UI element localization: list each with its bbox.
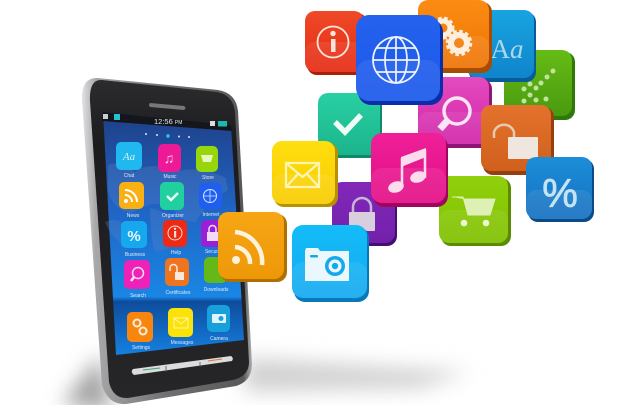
app: Search bbox=[124, 260, 150, 299]
app: Downloads: Downloads bbox=[204, 287, 229, 293]
speaker grille bbox=[149, 103, 186, 110]
icon tile: check bbox=[318, 93, 382, 158]
icon tile: cart bbox=[439, 176, 511, 246]
icon tile: gears bbox=[418, 0, 492, 73]
app: Certificates: Certificates bbox=[165, 290, 191, 296]
app: Organizer bbox=[160, 182, 184, 219]
screen bbox=[103, 112, 244, 355]
app: Store: Store bbox=[202, 175, 214, 181]
app: Certificates bbox=[165, 258, 191, 296]
icon tile: search bbox=[418, 77, 492, 148]
app: Camera: Camera bbox=[210, 336, 228, 342]
app: Search: Search bbox=[130, 293, 146, 299]
app: Chat: Chat bbox=[124, 173, 135, 179]
page dots bbox=[145, 133, 190, 138]
app: Help bbox=[163, 220, 187, 256]
floor shadow bbox=[62, 355, 470, 405]
icon tile: globe bbox=[356, 15, 443, 105]
app: Music: Music bbox=[163, 174, 177, 180]
app: Camera bbox=[207, 305, 230, 342]
app: Business: Business bbox=[125, 252, 146, 258]
app: Messages: Messages bbox=[171, 340, 194, 346]
app: Music bbox=[158, 144, 181, 180]
app: Security: Security bbox=[205, 249, 224, 255]
app: Downloads bbox=[204, 257, 229, 293]
app: Internet: Internet bbox=[203, 212, 220, 218]
globe glyph bbox=[373, 37, 419, 83]
status text: 12:56 PM bbox=[154, 117, 182, 126]
icon tile: percent: % bbox=[542, 172, 578, 216]
icon tile: open lock bbox=[481, 105, 554, 175]
app: Chat: Aa bbox=[122, 151, 136, 163]
app: Messages bbox=[168, 308, 194, 346]
icon tile: Aa: Aa bbox=[490, 34, 524, 64]
icon tile: mail bbox=[272, 141, 338, 207]
icon tile: purple lock bbox=[332, 182, 397, 246]
icon tile: info bbox=[305, 11, 367, 75]
app: News: News bbox=[127, 213, 140, 219]
icon tile: camera bbox=[292, 225, 369, 302]
app: Business bbox=[121, 221, 147, 258]
icon tile: rss bbox=[218, 212, 287, 282]
icon tile: downloads dots bbox=[504, 50, 575, 120]
world map bbox=[105, 164, 228, 251]
icon tile: percent bbox=[526, 157, 594, 222]
icon tile: Aa bbox=[467, 10, 536, 82]
icon tile: music bbox=[371, 133, 448, 207]
app: Security bbox=[201, 220, 225, 255]
status text bbox=[103, 114, 227, 126]
app: Chat bbox=[116, 142, 142, 179]
app: Organizer: Organizer bbox=[162, 213, 184, 219]
phone body bbox=[82, 78, 252, 404]
app: Help: Help bbox=[171, 250, 181, 256]
status bar bbox=[102, 112, 232, 131]
app: Store bbox=[196, 146, 218, 181]
home buttons bbox=[132, 356, 233, 375]
app: Business: % bbox=[127, 228, 141, 245]
app: Music: ♫ bbox=[164, 150, 174, 166]
app: Settings: Settings bbox=[132, 345, 151, 351]
app: Settings bbox=[127, 312, 153, 351]
smartphone bbox=[82, 78, 252, 404]
app: News bbox=[119, 182, 144, 219]
app: Internet bbox=[199, 183, 222, 218]
